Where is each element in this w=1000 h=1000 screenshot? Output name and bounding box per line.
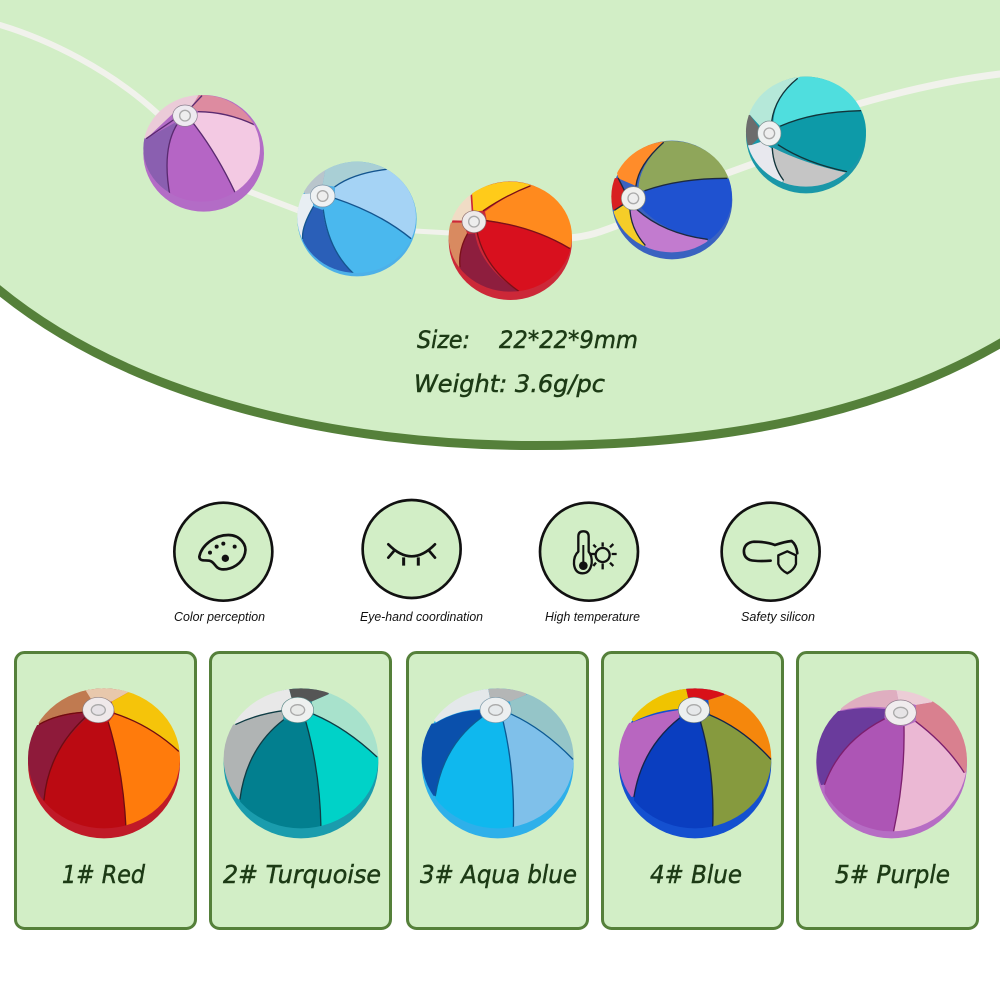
icon: silicone and shield — [722, 503, 820, 601]
feature: color perception — [174, 503, 272, 624]
panel: 2# Turquoise — [210, 652, 397, 928]
label: 5# Purple — [835, 860, 950, 889]
text: size: 22*22*9mm — [499, 326, 638, 354]
bead: blue on cord — [297, 162, 417, 276]
bead: turquoise — [224, 688, 378, 838]
bead: multicolour blue — [618, 688, 772, 838]
feature: safety silicon — [722, 503, 820, 624]
panel: 5# Purple — [798, 652, 990, 928]
panel: 3# Aqua blue — [408, 652, 593, 928]
icon: palette — [174, 503, 272, 601]
feature: high temperature — [540, 503, 640, 624]
label: 3# Aqua blue — [420, 860, 577, 889]
panel: curved green header background — [0, 0, 1000, 446]
label: Eye-hand coordination — [360, 609, 483, 624]
bead: red on cord — [448, 181, 572, 300]
feature: eye-hand coordination — [360, 500, 483, 624]
text: size — [417, 326, 638, 354]
text: weight: Weight: 3.6g/pc — [414, 370, 605, 398]
bead: turquoise on cord — [746, 76, 866, 194]
bead: purple on cord — [143, 95, 264, 212]
label: 2# Turquoise — [223, 860, 381, 889]
label: Safety silicon — [741, 609, 815, 624]
icon: closed eye — [363, 500, 461, 598]
label: High temperature — [545, 609, 640, 624]
icon: thermometer and sun — [540, 503, 638, 601]
bead: multicolour blue on cord — [611, 140, 732, 260]
label: Color perception — [174, 609, 265, 624]
white cord — [0, 25, 1000, 238]
bead: aqua blue — [422, 688, 574, 838]
panel: 1# Red — [13, 652, 200, 928]
label: 4# Blue — [650, 860, 742, 889]
panel: 4# Blue — [602, 652, 790, 928]
bead: purple — [816, 690, 967, 838]
text: size: Size: — [417, 326, 470, 354]
label: 1# Red — [62, 860, 145, 889]
bead: red — [28, 688, 180, 838]
